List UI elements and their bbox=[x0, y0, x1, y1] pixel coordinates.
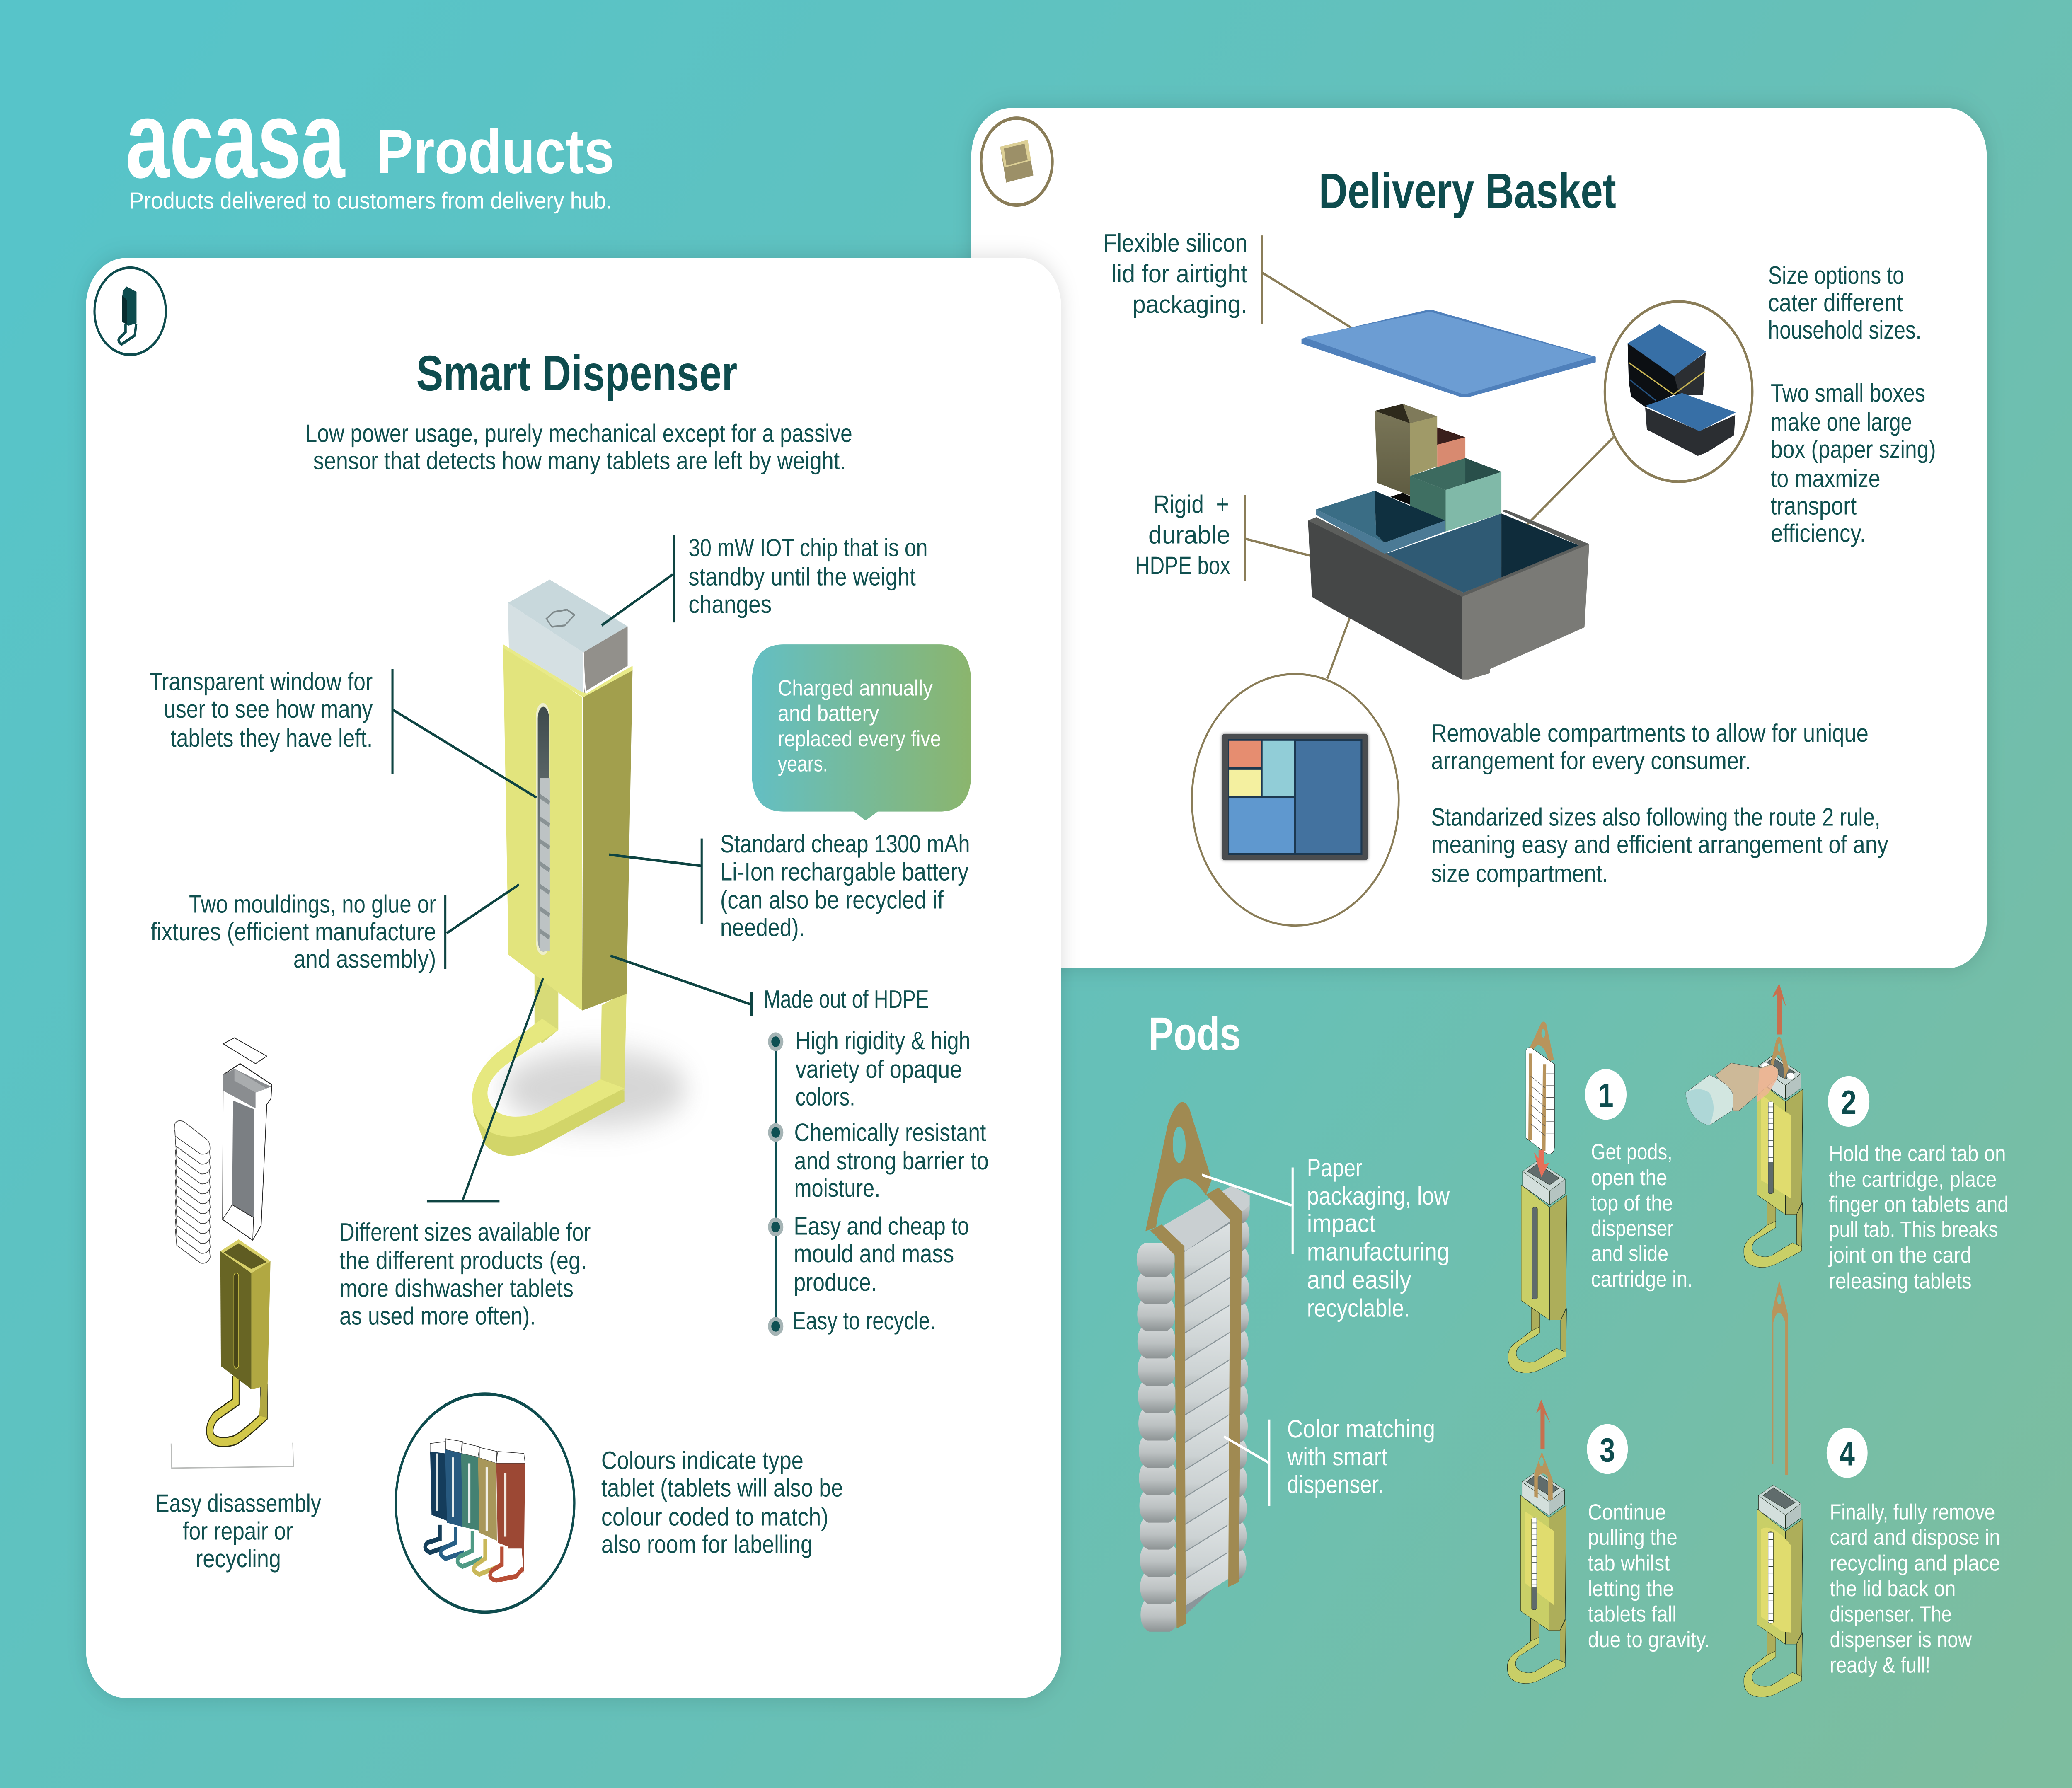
step 4 card being removed bbox=[1772, 1280, 1788, 1475]
lid bbox=[508, 580, 628, 693]
text: transparent window bbox=[149, 669, 373, 753]
compartments bbox=[1375, 404, 1501, 532]
blue unit bbox=[441, 1449, 464, 1558]
text: made out of HDPE: Made out of HDPE bbox=[764, 987, 929, 1014]
icon: dispenser bbox=[94, 268, 166, 355]
badge 2: 2 bbox=[1841, 1085, 1857, 1122]
text: removable compartments: meaning easy and efficient arrangement of any bbox=[1431, 832, 1888, 859]
text: two small boxes: make one large bbox=[1771, 409, 1912, 437]
step 2 text: finger on tablets and bbox=[1829, 1193, 2009, 1217]
body bbox=[503, 644, 633, 1011]
benefits text: Chemically resistant bbox=[794, 1120, 987, 1147]
step 1 text bbox=[1591, 1140, 1693, 1292]
text: two small boxes: to maxmize bbox=[1771, 466, 1881, 494]
back leg bbox=[535, 969, 558, 1043]
step 4 text: ready & full! bbox=[1830, 1653, 1930, 1677]
text: size options: Size options to bbox=[1768, 263, 1905, 290]
text: flexible lid: packaging. bbox=[1133, 292, 1247, 319]
text: IOT chip: standby until the weight bbox=[688, 564, 917, 592]
text: flexible lid: lid for airtight bbox=[1111, 261, 1249, 289]
text: color matching: with smart bbox=[1285, 1444, 1388, 1471]
text: removable compartments: size compartment. bbox=[1431, 861, 1608, 888]
badge 3 bbox=[1587, 1424, 1628, 1474]
text: size options: cater different bbox=[1768, 290, 1904, 318]
step 4 dispenser bbox=[1744, 1485, 1803, 1697]
text: two mouldings: fixtures (efficient manufacture bbox=[151, 919, 436, 946]
benefits text: High rigidity & high bbox=[796, 1028, 971, 1056]
illustration: main yellow dispenser bbox=[472, 580, 633, 1156]
text: two small boxes: Two small boxes bbox=[1771, 380, 1926, 408]
badge 4: 4 bbox=[1840, 1437, 1855, 1473]
text: paper packaging: impact bbox=[1307, 1211, 1377, 1239]
text: intro: sensor that detects how many tablets are left by weight. bbox=[313, 448, 846, 476]
step 1 text: top of the bbox=[1591, 1191, 1673, 1215]
text: size options bbox=[1768, 263, 1921, 345]
text: different sizes: the different products (eg. bbox=[339, 1248, 587, 1275]
benefits text: Easy to recycle. bbox=[792, 1309, 936, 1336]
step 2 text: Hold the card tab on bbox=[1829, 1142, 2006, 1166]
timeline dots bbox=[768, 1032, 783, 1336]
step 2 text: joint on the card bbox=[1828, 1243, 1972, 1268]
step 2 text bbox=[1828, 1142, 2009, 1293]
bracket bbox=[171, 1443, 293, 1468]
silicon lid bbox=[1302, 310, 1596, 397]
callout lines: pods bbox=[1202, 1168, 1293, 1506]
step 3 text: pulling the bbox=[1588, 1525, 1678, 1550]
text: transparent window: tablets they have left. bbox=[170, 726, 373, 753]
text: colours bbox=[601, 1448, 843, 1559]
olive unit bbox=[474, 1457, 499, 1574]
badge 4 bbox=[1827, 1428, 1868, 1478]
callout: charged annually: years. bbox=[778, 752, 828, 776]
step 3 text: letting the bbox=[1588, 1577, 1674, 1601]
text: colours: colour coded to match) bbox=[601, 1505, 828, 1532]
step 1 text: and slide bbox=[1591, 1242, 1669, 1266]
heading: Products: Products bbox=[377, 118, 615, 188]
text: two mouldings bbox=[151, 892, 436, 974]
step 4 text: recycling and place bbox=[1830, 1551, 2001, 1575]
text: two small boxes: transport bbox=[1771, 494, 1857, 521]
step 2 text: releasing tablets bbox=[1829, 1269, 1972, 1293]
badge 2 bbox=[1828, 1076, 1869, 1127]
text: rigid box: durable bbox=[1148, 523, 1230, 550]
text: color matching: dispenser. bbox=[1287, 1472, 1384, 1499]
green unit bbox=[457, 1454, 482, 1566]
step 2 text: the cartridge, place bbox=[1829, 1168, 1997, 1192]
text: battery: needed). bbox=[720, 915, 805, 943]
text: removable compartments: Removable compartments to allow for unique bbox=[1431, 721, 1869, 748]
text: easy disassembly bbox=[155, 1491, 322, 1574]
step 1 text: Get pods, bbox=[1591, 1140, 1673, 1164]
text: two small boxes: box (paper szing) bbox=[1771, 437, 1936, 465]
step 1 dispenser bbox=[1508, 1161, 1567, 1373]
timeline: HDPE benefits bbox=[768, 1028, 989, 1336]
text: IOT chip: changes bbox=[688, 592, 772, 619]
text: colours: Colours indicate type bbox=[601, 1448, 804, 1476]
text: easy disassembly: Easy disassembly bbox=[155, 1491, 322, 1518]
step 4 text: the lid back on bbox=[1830, 1577, 1956, 1601]
benefits text: Easy and cheap to bbox=[794, 1214, 970, 1241]
step 3 text: tab whilst bbox=[1588, 1551, 1670, 1575]
badge 1: 1 bbox=[1598, 1078, 1614, 1115]
text: flexible lid: Flexible silicon bbox=[1104, 230, 1247, 258]
icon: basket bbox=[981, 118, 1052, 205]
step 4 text: Finally, fully remove bbox=[1830, 1500, 1995, 1524]
subtitle: Products delivered to customers from delivery hub. bbox=[129, 189, 612, 215]
step 2 text: pull tab. This breaks bbox=[1829, 1217, 1998, 1242]
text: different sizes: as used more often). bbox=[339, 1304, 536, 1331]
step 2 bbox=[1685, 983, 2009, 1293]
step 4 bbox=[1744, 1280, 2001, 1697]
text: removable compartments: arrangement for every consumer. bbox=[1431, 748, 1751, 776]
text: easy disassembly: recycling bbox=[196, 1546, 281, 1574]
step 3 text: tablets fall bbox=[1588, 1602, 1677, 1626]
circle: compartment layout from above bbox=[1192, 674, 1399, 926]
text: different sizes bbox=[339, 1219, 591, 1331]
step 1 text: dispenser bbox=[1591, 1217, 1674, 1241]
inner shell bbox=[223, 1064, 272, 1240]
step 3 text: Continue bbox=[1588, 1500, 1666, 1524]
text: two small boxes bbox=[1771, 380, 1936, 548]
step 4 text: dispenser is now bbox=[1830, 1628, 1972, 1652]
badge 1 bbox=[1585, 1069, 1627, 1120]
text: battery: Li-Ion rechargable battery bbox=[720, 859, 969, 887]
window bbox=[536, 703, 550, 955]
illustration: pod cartridge bbox=[1137, 1102, 1250, 1632]
callout: charged annually: and battery bbox=[778, 702, 879, 726]
heading: Smart Dispenser: Smart Dispenser bbox=[416, 345, 737, 402]
text: two mouldings: Two mouldings, no glue or bbox=[189, 892, 436, 919]
icon: hand bbox=[1685, 1063, 1779, 1125]
panel: delivery basket bbox=[971, 108, 1987, 968]
card tab bbox=[1145, 1102, 1212, 1231]
step 4 text bbox=[1830, 1500, 2001, 1677]
step 3 card tab bbox=[1534, 1452, 1553, 1500]
header bbox=[126, 79, 615, 215]
text: paper packaging: recyclable. bbox=[1307, 1296, 1410, 1323]
right leg bbox=[600, 992, 627, 1091]
text: intro: Low power usage, purely mechanical except for a passive bbox=[305, 421, 852, 448]
arrow: pull up bbox=[1772, 983, 1786, 1035]
panel: smart dispenser bbox=[86, 258, 1061, 1698]
step 3 bbox=[1507, 1400, 1710, 1684]
text: colours: also room for labelling bbox=[601, 1532, 813, 1559]
red unit bbox=[490, 1463, 525, 1580]
benefits text bbox=[792, 1028, 989, 1336]
tablet stack bbox=[175, 1121, 210, 1263]
tablets bbox=[1137, 1186, 1250, 1632]
text: rigid box: Rigid + bbox=[1154, 492, 1229, 519]
text: battery: Standard cheap 1300 mAh bbox=[720, 832, 970, 859]
arrow: insert bbox=[1534, 1150, 1549, 1177]
benefits text: and strong barrier to bbox=[794, 1149, 989, 1176]
foot loop bbox=[472, 1019, 625, 1156]
text: easy disassembly: for repair or bbox=[183, 1519, 293, 1546]
logo: acasa: acasa bbox=[126, 79, 346, 201]
text: rigid box: HDPE box bbox=[1135, 553, 1230, 581]
benefits text: mould and mass bbox=[794, 1241, 954, 1269]
step 2 dispenser bbox=[1744, 1055, 1803, 1268]
circle: stacked box sizes bbox=[1605, 302, 1752, 481]
text: transparent window: Transparent window for bbox=[149, 669, 373, 697]
benefits text: produce. bbox=[794, 1270, 877, 1297]
text: flexible lid bbox=[1104, 230, 1249, 319]
heading: Delivery Basket: Delivery Basket bbox=[1319, 163, 1616, 219]
text: two mouldings: and assembly) bbox=[293, 946, 436, 974]
navy unit bbox=[425, 1452, 447, 1553]
step 3 text bbox=[1588, 1500, 1710, 1652]
text: paper packaging bbox=[1307, 1155, 1451, 1323]
text: color matching: Color matching bbox=[1287, 1416, 1435, 1444]
text: different sizes: Different sizes available for bbox=[339, 1219, 591, 1247]
HDPE box bbox=[1308, 491, 1589, 680]
badge 3: 3 bbox=[1600, 1432, 1615, 1470]
text: intro bbox=[305, 421, 852, 476]
step 1 text: cartridge in. bbox=[1591, 1267, 1693, 1292]
text: color matching bbox=[1285, 1416, 1435, 1499]
text: transparent window: user to see how many bbox=[164, 697, 373, 724]
base moulding bbox=[210, 1239, 271, 1442]
step 4 text: dispenser. The bbox=[1830, 1602, 1952, 1626]
benefits text: colors. bbox=[796, 1084, 855, 1112]
heading: Pods: Pods bbox=[1148, 1009, 1241, 1061]
callout: charged annually: replaced every five bbox=[778, 727, 942, 751]
step 3 text: due to gravity. bbox=[1588, 1628, 1710, 1652]
text: IOT chip bbox=[688, 535, 928, 619]
illustration: exploded delivery basket bbox=[1302, 310, 1596, 680]
step 1 pod pack bbox=[1526, 1022, 1554, 1154]
callout lines: basket bbox=[1245, 235, 1613, 679]
step 4 text: card and dispose in bbox=[1830, 1525, 2000, 1550]
callout: charged annually bbox=[752, 644, 971, 820]
shadow: dispenser bbox=[502, 1050, 687, 1127]
text: size options: household sizes. bbox=[1768, 318, 1921, 345]
text: paper packaging: Paper bbox=[1307, 1155, 1363, 1183]
text: removable compartments: Standarized sizes also following the route 2 rule, bbox=[1431, 805, 1881, 832]
text: rigid box bbox=[1135, 492, 1230, 581]
text: two small boxes: efficiency. bbox=[1771, 521, 1866, 548]
benefits text: moisture. bbox=[794, 1176, 880, 1203]
text: colours: tablet (tablets will also be bbox=[601, 1476, 843, 1503]
benefits text: variety of opaque bbox=[796, 1057, 962, 1084]
circle: colour range bbox=[396, 1394, 574, 1612]
arrow: keep pulling bbox=[1536, 1400, 1551, 1449]
text: paper packaging: and easily bbox=[1307, 1268, 1411, 1295]
step 1 text: open the bbox=[1591, 1166, 1668, 1190]
lid plate bbox=[223, 1038, 267, 1064]
text: paper packaging: manufacturing bbox=[1307, 1239, 1450, 1267]
illustration: exploded dispenser bbox=[171, 1038, 293, 1468]
step 2 card tab bbox=[1769, 1037, 1789, 1079]
text: battery bbox=[720, 832, 970, 943]
step 1 bbox=[1508, 1022, 1693, 1373]
step 3 dispenser bbox=[1507, 1471, 1566, 1684]
text: IOT chip: 30 mW IOT chip that is on bbox=[688, 535, 928, 563]
callout: charged annually: Charged annually bbox=[778, 676, 933, 700]
paper straps bbox=[1150, 1188, 1242, 1628]
text: paper packaging: packaging, low bbox=[1307, 1183, 1451, 1211]
callout lines: dispenser bbox=[392, 535, 751, 1201]
text: battery: (can also be recycled if bbox=[720, 888, 944, 915]
text: different sizes: more dishwasher tablets bbox=[339, 1276, 574, 1303]
text: removable compartments bbox=[1431, 721, 1888, 888]
